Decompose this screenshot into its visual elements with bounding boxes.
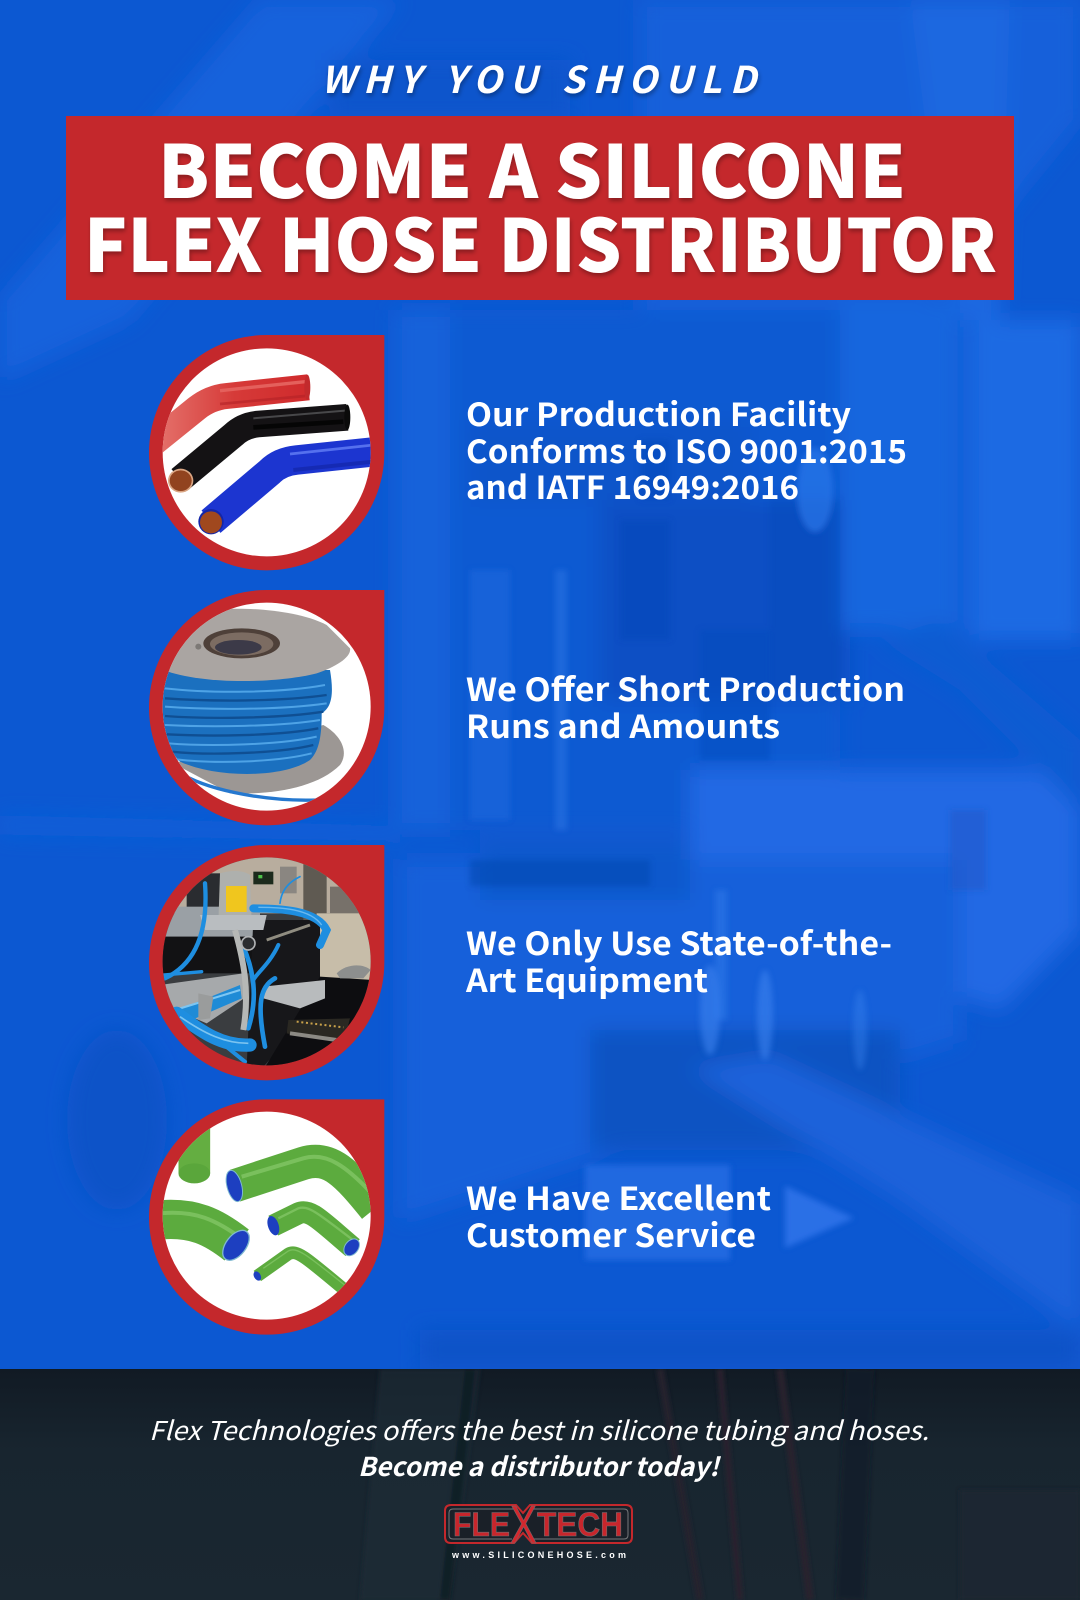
text: item 1 — [466, 390, 907, 509]
text: item 3 — [465, 919, 892, 1002]
footer tagline: Become a distributor today! — [358, 1447, 721, 1484]
panel: machinery photo — [149, 845, 384, 1080]
logo: Flextech: X — [510, 1495, 537, 1555]
footer tagline — [149, 1411, 929, 1484]
text: item 4: We Have Excellent — [466, 1174, 771, 1220]
text: item 1: and IATF 16949:2016 — [466, 463, 799, 509]
text: item 1: Our Production Facility — [466, 390, 851, 436]
logo: Flextech: TECH — [537, 1506, 623, 1544]
text: item 4 — [466, 1174, 771, 1257]
title line 2: FLEX HOSE DISTRIBUTOR — [84, 188, 997, 294]
footer tagline: Flex Technologies offers the best in silicone tubing and hoses. — [149, 1411, 929, 1448]
logo url: www.SILICONEHOSE.com — [451, 1550, 626, 1560]
text: item 2: We Offer Short Production — [466, 665, 905, 711]
logo: Flextech — [445, 1495, 632, 1560]
text: item 3: We Only Use State-of-the- — [466, 919, 892, 965]
eyebrow heading: WHY YOU SHOULD — [321, 50, 761, 104]
text: item 2 — [466, 665, 905, 748]
panel: hose reel — [149, 590, 384, 825]
footer band — [0, 1369, 1080, 1600]
text: item 2: Runs and Amounts — [466, 702, 780, 748]
text: item 4: Customer Service — [466, 1211, 756, 1257]
panel: green hoses — [149, 1099, 384, 1335]
panel: hose elbows — [149, 335, 384, 570]
text: item 3: Art Equipment — [465, 956, 708, 1002]
title line 1: BECOME A SILICONE — [158, 114, 906, 220]
title banner — [66, 114, 1014, 300]
logo: Flextech: FLE — [453, 1506, 510, 1544]
text: item 1: Conforms to ISO 9001:2015 — [466, 427, 907, 473]
